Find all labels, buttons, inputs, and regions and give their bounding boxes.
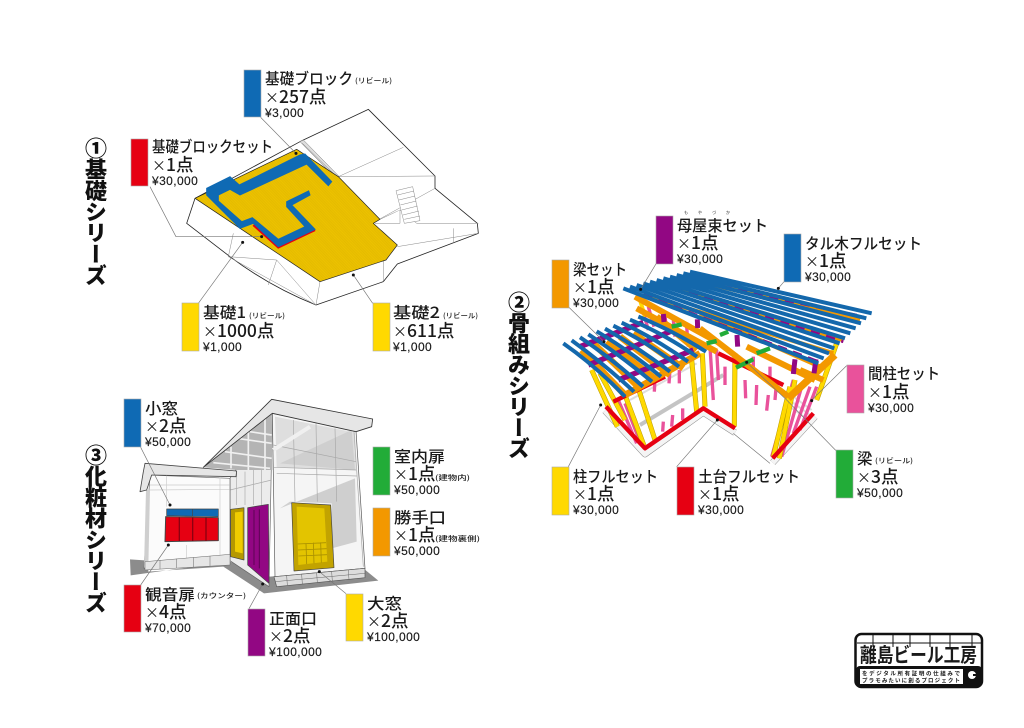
posts yellow: [592, 343, 837, 458]
label: small window: 小窓: [145, 397, 178, 419]
left block detail: [150, 475, 229, 560]
beams orange: [635, 297, 823, 397]
label: back door: [373, 506, 480, 558]
label: back door: ×1点: [394, 522, 435, 547]
label: interior door: ×1点: [394, 461, 435, 486]
retaining wall: [300, 140, 339, 177]
logo band: [856, 666, 982, 687]
grey beam: [640, 375, 723, 425]
label: foundation 2: 基礎2: [393, 301, 440, 323]
label: foundation 1: [182, 301, 285, 354]
wall grid: [230, 468, 272, 505]
label: interior door: 室内扉: [394, 445, 445, 467]
studs pink: [618, 307, 817, 457]
label: post full set: [552, 465, 658, 517]
small window: [167, 509, 218, 517]
label: foundation block: [244, 67, 392, 120]
label: foundation block: 基礎ブロック: [265, 67, 353, 89]
wall lower shade: [280, 478, 357, 548]
label: back door: 勝手口: [394, 506, 446, 528]
label: foundation block set: 基礎ブロックセット: [152, 135, 273, 157]
logo: プラモみたいに創るプロジェクト: [862, 676, 960, 684]
soffit: [204, 400, 272, 470]
label: large window: 大窓: [367, 592, 402, 614]
heading: series 1: ①基礎シリーズ: [80, 137, 112, 285]
label: foundation block set: ×1点: [152, 152, 193, 177]
label: beam reveal: (リビール): [875, 456, 913, 466]
left block edge shade: [144, 490, 150, 567]
ground shadow: [130, 559, 378, 593]
label: sill full set: 土台フルセット: [698, 465, 800, 487]
label: small window: ¥50,000: [144, 435, 191, 449]
right wall: [272, 413, 365, 577]
label: front door: ¥100,000: [268, 645, 322, 659]
terrain detail lines: [228, 147, 478, 305]
terrain outline: [187, 109, 478, 305]
large window: [292, 503, 334, 571]
label: foundation block: ¥3,000: [264, 106, 304, 120]
label: interior door: [373, 445, 470, 497]
base band: [274, 568, 365, 587]
soffit rafters: [213, 413, 272, 470]
label: beam set: 梁セット: [573, 258, 627, 280]
label: rafter full set: ¥30,000: [804, 270, 851, 284]
label: stud set: [847, 362, 940, 415]
label: purlin strut set: ¥30,000: [676, 252, 723, 266]
label: back door: (建物裏側): [435, 534, 480, 544]
heading: series 2: ②骨組みシリーズ: [503, 291, 535, 458]
label: post full set: 柱フルセット: [573, 465, 658, 487]
label: front door: ×2点: [269, 623, 310, 648]
label: beam set: ×1点: [573, 274, 614, 299]
side door yellow: [231, 508, 244, 560]
label: stud set: ×1点: [868, 379, 909, 404]
label: sill full set: ×1点: [698, 481, 739, 506]
label: stud set: 間柱セット: [868, 362, 940, 384]
label: beam reveal: ×3点: [857, 464, 898, 489]
door frames: [179, 517, 206, 541]
label: double doors: [124, 583, 246, 635]
roof: [203, 399, 373, 467]
label: large window: ×2点: [367, 608, 408, 633]
label: foundation 2: ×611点: [393, 318, 454, 343]
logo badge: [968, 671, 976, 679]
stairs: [375, 187, 420, 223]
blue block wall: [207, 154, 332, 247]
foundation blocks: [207, 154, 332, 247]
illustration: finished building: [130, 399, 378, 609]
label: small window: [124, 397, 191, 449]
leader lines: [568, 263, 847, 467]
label: rafter full set: [784, 232, 922, 284]
label: beam reveal: 梁: [857, 447, 873, 469]
base foundation: [605, 411, 815, 463]
label: double doors: ×4点: [145, 599, 186, 624]
label: rafter full set: ×1点: [805, 248, 846, 273]
left block base: [145, 554, 230, 570]
label: double doors: ¥70,000: [144, 621, 191, 635]
left roof: [140, 463, 237, 492]
label: beam reveal: ¥50,000: [856, 486, 903, 500]
front door purple: [248, 504, 269, 583]
label: foundation block set: ¥30,000: [151, 174, 198, 188]
label: foundation block: (リビール): [355, 76, 392, 86]
label: post full set: ×1点: [573, 481, 614, 506]
logo tagline: をデジタル所有証明の仕組みで: [862, 670, 960, 678]
label: foundation 1: ¥1,000: [202, 340, 242, 354]
label: purlin strut set: ×1点: [677, 230, 718, 255]
leader lines: [150, 117, 373, 303]
leader lines: [141, 447, 346, 609]
label: rafter full set: タル木フルセット: [805, 232, 922, 254]
logo: [856, 634, 982, 687]
heading: series 3: ③化粧材シリーズ: [80, 444, 112, 613]
label: sill full set: [677, 465, 800, 517]
label: foundation block set: [131, 135, 273, 188]
label: interior door: (建物内): [435, 473, 470, 483]
label: post full set: ¥30,000: [572, 503, 619, 517]
label: foundation 2: ¥1,000: [392, 340, 432, 354]
label: beam set: [552, 258, 627, 310]
beams green: [672, 324, 770, 368]
left block: [144, 475, 230, 568]
label: foundation 1: 基礎1: [203, 301, 246, 323]
label: purlin strut set: [656, 209, 768, 266]
label: interior door: ¥50,000: [393, 483, 440, 497]
label: purlin strut set: もやづか: [684, 209, 730, 216]
label: foundation 2: (リビール): [443, 311, 478, 321]
counter doors: [165, 517, 218, 542]
purlins purple: [580, 322, 693, 380]
leader dots: [167, 503, 321, 585]
illustration: foundation terrain: [150, 109, 478, 305]
label: purlin strut set: 母屋束セット: [677, 214, 768, 236]
label: beam set: ¥30,000: [572, 296, 619, 310]
wall studs lines: [273, 420, 363, 567]
foundation yellow slab: [195, 149, 397, 282]
label: beam reveal: [836, 447, 913, 500]
leader dots: [241, 152, 355, 276]
label: large window: ¥100,000: [366, 630, 420, 644]
label: foundation 1: ×1000点: [203, 318, 274, 343]
wall highlight: [273, 427, 310, 450]
label: back door: ¥50,000: [393, 544, 440, 558]
label: sill full set: ¥30,000: [697, 503, 744, 517]
label: foundation 1: (リビール): [249, 311, 285, 321]
wall diagonal shade: [280, 430, 355, 470]
red block set: [253, 225, 315, 247]
label: double doors: 観音扉: [145, 583, 195, 605]
left sloped wall: [230, 414, 272, 587]
label: foundation block: ×257点: [265, 84, 326, 109]
label: stud set: ¥30,000: [867, 401, 914, 415]
leader dots: [599, 287, 813, 421]
label: double doors: (カウンター): [197, 591, 246, 601]
wall upper shade: [275, 417, 356, 470]
label: foundation 2: [373, 301, 478, 354]
rafters blue: [563, 272, 872, 397]
sill red: [606, 353, 813, 458]
illustration: timber frame: [563, 263, 872, 467]
logo title: 離島ビール工房: [860, 639, 977, 668]
label: front door: 正面口: [269, 607, 317, 629]
label: small window: ×2点: [145, 413, 186, 438]
label: large window: [346, 592, 420, 644]
label: front door: [248, 607, 322, 659]
